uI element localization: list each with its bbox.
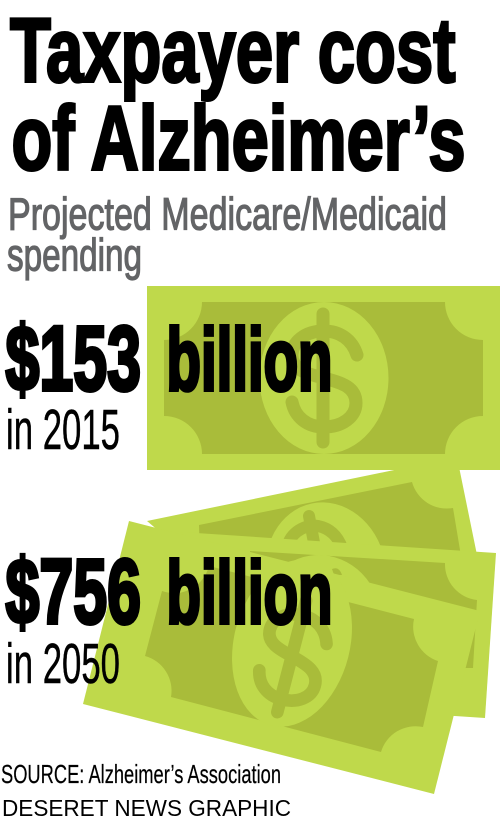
2015 amount xyxy=(6,308,332,410)
2015 amount: billion xyxy=(166,310,332,409)
2050 amount: $756 xyxy=(6,541,141,643)
credit line: DESERET NEWS GRAPHIC xyxy=(2,795,291,821)
icon: front banknote xyxy=(83,521,480,794)
title xyxy=(10,0,466,190)
source line: SOURCE: Alzheimer’s Association xyxy=(1,759,281,789)
2050 year label: in 2050 xyxy=(6,632,120,696)
2015 year label: in 2015 xyxy=(6,398,120,462)
subtitle: spending xyxy=(7,230,142,280)
icon: back banknote xyxy=(147,457,477,653)
subtitle xyxy=(7,188,447,280)
2050 amount xyxy=(6,541,332,643)
icon: middle banknote xyxy=(170,532,496,718)
icon: top banknote xyxy=(147,286,500,470)
2050 amount: billion xyxy=(166,543,332,642)
2015 amount: $153 xyxy=(6,308,141,410)
